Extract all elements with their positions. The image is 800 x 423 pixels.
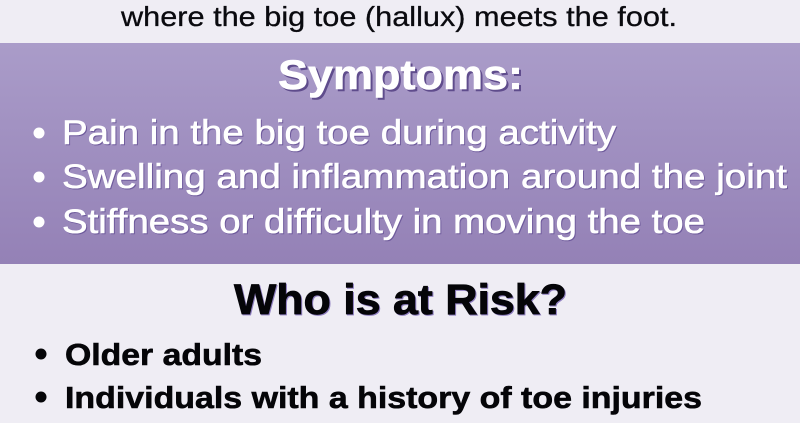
symptom: stiffness: Stiffness or difficulty in moving the toe xyxy=(62,203,705,241)
symptoms heading: Symptoms: xyxy=(280,53,525,100)
risk list xyxy=(36,337,702,415)
risk: toe injuries: Individuals with a history of toe injuries xyxy=(65,380,702,415)
symptom: stiffness: Stiffness or difficulty in moving the toe xyxy=(63,204,706,242)
risk heading: Who is at Risk? xyxy=(235,277,568,325)
symptom: pain: Pain in the big toe during activity xyxy=(62,114,616,152)
risk heading: Who is at Risk? xyxy=(234,276,567,324)
risk: older adults: Older adults xyxy=(65,337,262,372)
intro text: where the big toe (hallux) meets the foot. xyxy=(120,1,677,32)
symptom: swelling: Swelling and inflammation around the joint xyxy=(62,158,788,196)
panel background xyxy=(0,43,800,264)
panel: symptoms xyxy=(0,43,800,264)
symptoms list xyxy=(34,114,789,242)
symptom: pain: Pain in the big toe during activity xyxy=(63,115,617,153)
symptoms heading: Symptoms: xyxy=(278,51,523,98)
symptom: swelling: Swelling and inflammation around the joint xyxy=(63,159,789,197)
